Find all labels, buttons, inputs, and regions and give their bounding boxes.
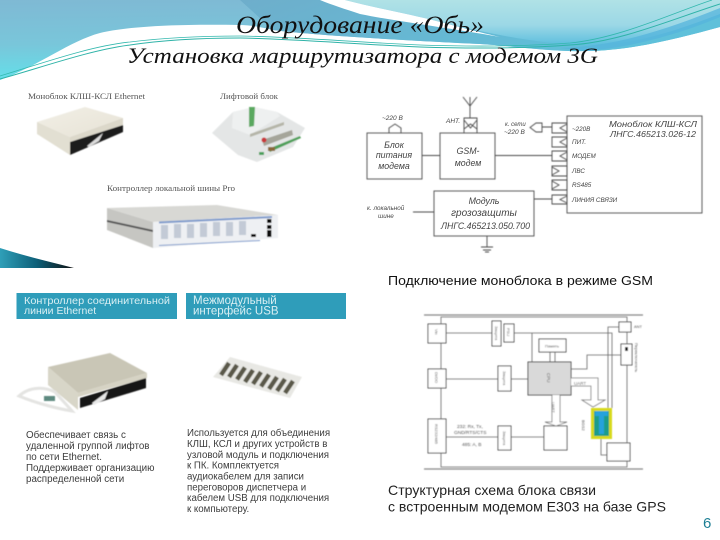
icon: monoblock device	[37, 107, 123, 155]
background: top wave header	[0, 0, 720, 80]
label: lift block: Лифтовой блок	[220, 92, 278, 101]
box: switch	[621, 344, 632, 365]
icon: lift block device	[212, 107, 305, 162]
box: memory	[539, 339, 566, 352]
power socket	[389, 124, 401, 133]
box: switch 232/485	[544, 426, 567, 450]
labels: GSM connection diagram: модем	[455, 158, 481, 168]
labels: GSM connection diagram: ЛНГС.465213.050.700	[440, 221, 530, 231]
chart: E303 block structure diagram: 232: Rx, Tx,	[457, 424, 483, 430]
panel: USB interface heading	[186, 293, 346, 319]
labels: GSM connection diagram: ~220В	[572, 126, 590, 133]
text block: USB interface description: переговоров диспетчера и	[187, 482, 306, 494]
panel: Ethernet controller heading: линии Ethernet	[24, 305, 96, 317]
chart: E303 block structure diagram: UART	[574, 381, 586, 386]
text block: USB interface description: к компьютеру.	[187, 504, 249, 515]
title: Установка маршрутизатора с модемом 3G	[127, 43, 598, 68]
icon: GPS modem chip	[591, 408, 612, 439]
panel: devices photos	[28, 92, 305, 248]
page number: 6	[703, 515, 711, 532]
connector stack	[552, 123, 567, 204]
icon: local bus controller device	[107, 205, 278, 248]
panel: Ethernet controller heading: Контроллер соединительной	[24, 295, 170, 307]
connections	[413, 156, 552, 252]
box: protection 2	[498, 366, 511, 391]
box: GSM modem	[440, 133, 495, 179]
box: RS232/485	[428, 419, 446, 453]
chart: E303 block structure diagram: Vin	[434, 329, 439, 335]
background: bottom-left wedge	[0, 248, 74, 268]
labels: GSM connection diagram: ~220 В	[504, 129, 525, 136]
text block: Ethernet controller description: Поддерживает организацию	[26, 463, 154, 474]
box: protection 3	[498, 426, 511, 450]
labels: GSM connection diagram: GSM-	[457, 146, 480, 156]
labels: GSM connection diagram	[367, 115, 698, 231]
box: CPU	[528, 362, 571, 395]
text block: Ethernet controller description: распределенной сети	[26, 474, 124, 485]
chart: E303 block structure diagram: UART	[551, 402, 556, 413]
labels: GSM connection diagram: ~220 В	[382, 115, 403, 122]
panel: USB interface heading: интерфейс USB	[193, 306, 279, 318]
labels: GSM connection diagram: ЛИНИЯ СВЯЗИ	[571, 197, 618, 204]
chart: E303 block structure diagram	[424, 315, 643, 469]
text block: USB interface description: к ПК. Комплектуется	[187, 460, 279, 472]
text block: USB interface description: КЛШ, КСЛ и других устройств в	[187, 439, 327, 450]
panel: Ethernet controller heading	[16, 293, 177, 319]
title: Оборудование «Обь»	[236, 12, 484, 39]
chart: E303 block structure diagram: Защита	[494, 326, 499, 341]
text block: Ethernet controller description: удаленной группой лифтов	[26, 441, 150, 452]
labels: GSM connection diagram: модема	[378, 161, 410, 171]
box: DI/DO	[428, 369, 446, 388]
labels: GSM connection diagram: RS485	[572, 182, 592, 189]
icon: Ethernet controller device	[19, 353, 147, 411]
chart: E303 block structure diagram: Защита	[502, 371, 507, 386]
labels: GSM connection diagram: грозозащиты	[451, 208, 518, 219]
chart: E303 block structure diagram: Переключатель	[634, 343, 639, 372]
label: monoblock: Моноблок КЛШ-КСЛ Ethernet	[28, 92, 146, 101]
labels: GSM connection diagram: шине	[378, 213, 394, 220]
labels: GSM connection diagram: ПИТ.	[572, 139, 586, 146]
chart: E303 block structure diagram: Память	[545, 344, 559, 348]
panel: USB interface heading: Межмодульный	[193, 295, 277, 307]
caption: E303 structure diagram: с встроенным модемом Е303 на базе GPS	[388, 498, 666, 514]
label: local bus controller: Контроллер локальной шины Pro	[107, 184, 235, 193]
labels: GSM connection diagram: МОДЕМ	[572, 153, 597, 160]
chart: E303 block structure diagram: ANT	[634, 324, 643, 329]
labels: GSM connection diagram: ЛВС	[571, 168, 585, 175]
chart: E303 block structure diagram: 485: A, B	[462, 442, 481, 448]
text block: USB interface description: узловой модуль и подключения	[187, 450, 329, 461]
title	[127, 12, 598, 68]
chart: E303 block structure diagram: GND/RTS/CTS	[454, 430, 486, 436]
chart: E303 block structure diagram: BGS2	[581, 420, 586, 431]
chart: E303 block structure diagram: PSU	[506, 328, 511, 336]
text block: Ethernet controller description: Обеспечивает связь с	[26, 430, 126, 441]
labels: GSM connection diagram: Моноблок КЛШ-КСЛ	[609, 120, 698, 129]
labels: GSM connection diagram: ЛНГС.465213.026-12	[609, 130, 697, 139]
box: surge protection	[434, 191, 534, 236]
box: PSU	[504, 324, 514, 342]
labels: GSM connection diagram: Модуль	[469, 196, 500, 206]
text block: Ethernet controller description: по сети Ethernet.	[26, 452, 102, 463]
antenna	[463, 97, 477, 133]
icon: USB interface board	[213, 357, 302, 398]
box: protection 1	[492, 321, 501, 346]
chart: E303 block structure diagram: Защита	[502, 431, 507, 446]
chart: E303 block structure diagram: DI/DO	[434, 372, 439, 383]
labels: GSM connection diagram: питания	[376, 150, 412, 160]
box: SIM	[607, 443, 630, 461]
box: monoblock	[567, 116, 702, 213]
caption: GSM connection: Подключение моноблока в режиме GSM	[388, 273, 653, 288]
text block: USB interface description: Используется для объединения	[187, 428, 330, 439]
box: ANT	[619, 322, 631, 332]
box: modem power supply	[367, 133, 422, 179]
chart: GSM connection diagram	[367, 97, 702, 252]
box: Vin	[428, 324, 446, 343]
chart: E303 block structure diagram: RS232/485	[434, 424, 439, 445]
labels: GSM connection diagram: АНТ.	[445, 118, 460, 125]
labels: GSM connection diagram: к. сети	[505, 122, 526, 128]
chart: E303 block structure diagram: CPU	[546, 373, 551, 383]
caption: E303 structure diagram: Структурная схема блока связи	[388, 482, 596, 498]
labels: GSM connection diagram: к. локальной	[367, 204, 405, 212]
arrows: UART	[545, 378, 605, 426]
labels: GSM connection diagram: Блок	[384, 140, 405, 150]
text block: USB interface description: аудиокабелем для записи	[187, 472, 304, 482]
text block: USB interface description: кабелем USB для подключения	[187, 493, 329, 504]
